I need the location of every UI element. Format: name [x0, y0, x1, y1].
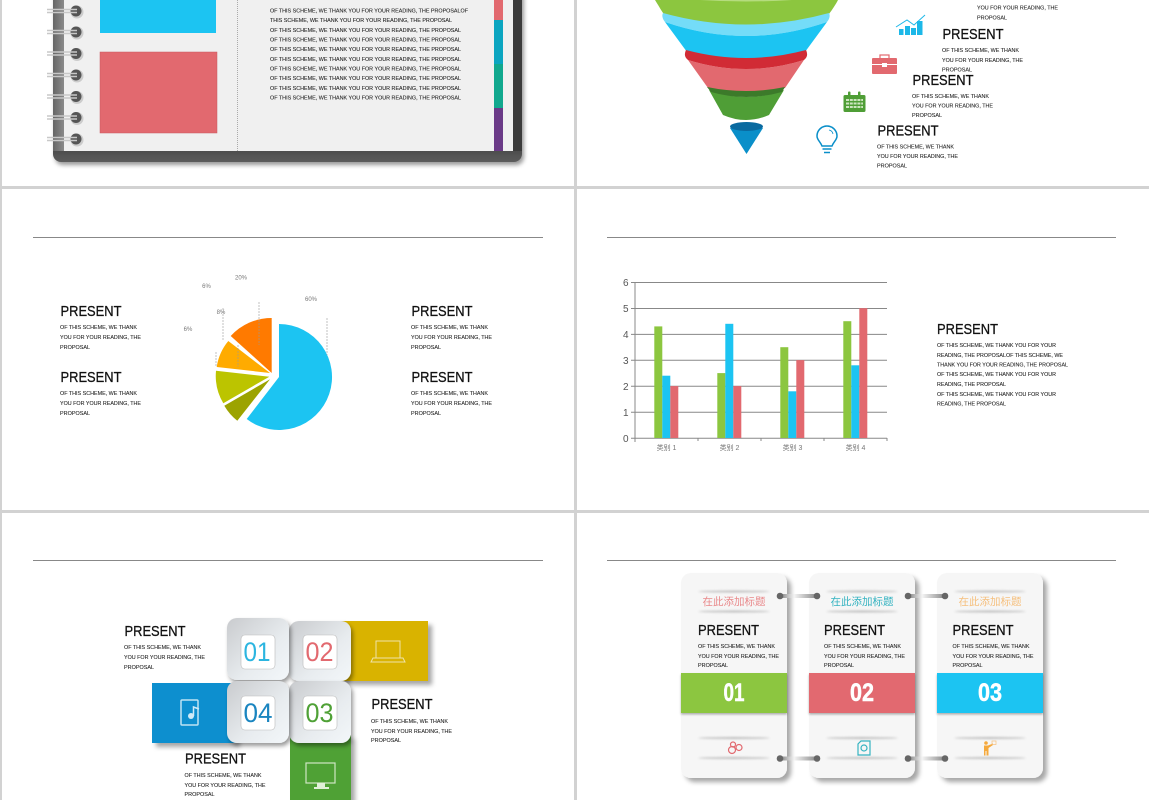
card 2: PROPOSAL [824, 663, 854, 669]
card 1: 在此添加标题 [702, 595, 766, 608]
bar chart: 2 [623, 382, 629, 393]
text: tile item 04: PRESENT [185, 750, 246, 768]
text: item calendar: YOU FOR YOUR READING, THE [877, 154, 958, 160]
text: bar chart description: READING, THE PROPOSAL [937, 402, 1006, 408]
text: pie right top: YOU FOR YOUR READING, THE [411, 335, 492, 341]
text: pie left top: PRESENT [60, 303, 122, 320]
card 3: OF THIS SCHEME, WE THANK [952, 644, 1030, 650]
bar chart: 6 [623, 278, 629, 289]
text: pie right top [411, 303, 492, 351]
tile 04 [227, 681, 289, 743]
text: pie right top: PRESENT [412, 303, 472, 320]
icon: calendar [844, 92, 866, 112]
pink image block [100, 52, 217, 133]
bar chart: 1 [623, 408, 629, 419]
text: tile item 04: YOU FOR YOUR READING, THE [184, 783, 266, 789]
card 1: PRESENT [698, 622, 759, 639]
text: tile item 01: PROPOSAL [124, 665, 154, 671]
bar chart: 类别 3 [783, 443, 803, 452]
gold block with laptop icon [340, 621, 428, 681]
panel: funnel slide [577, 0, 1149, 186]
card 3: 在此添加标题 [958, 595, 1022, 608]
card 1: YOU FOR YOUR READING, THE [698, 654, 779, 660]
tile 01 [227, 618, 289, 680]
text: top item: PROPOSAL [977, 16, 1007, 22]
pie chart: 6% [202, 284, 212, 290]
text: tile item 03: PROPOSAL [371, 738, 401, 744]
text: bar chart description: READING, THE PROPOSALOF THIS SCHEME, WE [937, 353, 1063, 359]
text: item chart: PRESENT [942, 26, 1004, 43]
panel: three cards slide [577, 513, 1149, 800]
card 3: PRESENT [952, 622, 1014, 639]
tile 04: 04 [244, 698, 272, 728]
text: pie left top [60, 303, 141, 351]
pie chart [184, 276, 332, 430]
text: bar chart description: READING, THE PROPOSAL [937, 382, 1006, 388]
icon: presenter [984, 741, 996, 756]
panel: numbered tiles slide [2, 513, 574, 800]
card 2: 02 [850, 679, 874, 707]
text: tile item 03: PRESENT [372, 696, 432, 713]
text: tile item 01: YOU FOR YOUR READING, THE [124, 655, 205, 661]
text: item briefcase: PROPOSAL [912, 113, 942, 119]
text: pie left top: PROPOSAL [60, 345, 90, 351]
bar chart: 4 [623, 330, 629, 341]
connector rings [777, 593, 948, 762]
bar chart [623, 278, 887, 452]
pie chart: 20% [235, 276, 248, 282]
text: pie left bottom [60, 369, 141, 417]
tile 03: 03 [306, 698, 334, 728]
text: item briefcase: YOU FOR YOUR READING, THE [912, 104, 993, 110]
text: tile item 03: OF THIS SCHEME, WE THANK [371, 719, 448, 725]
notebook text: THIS SCHEME, WE THANK YOU FOR YOUR READING, THE PROPOSAL [270, 18, 452, 24]
panel: pie chart slide [2, 189, 574, 510]
blue image block [100, 0, 216, 33]
tile 01: 01 [244, 637, 270, 667]
bar chart: 类别 2 [720, 443, 740, 452]
bar chart: 0 [623, 434, 629, 445]
text: pie right bottom: PRESENT [412, 369, 472, 386]
icon: rising chart [896, 15, 925, 35]
card 3: YOU FOR YOUR READING, THE [952, 654, 1034, 660]
icon: gears [728, 742, 742, 754]
card 2: YOU FOR YOUR READING, THE [824, 654, 905, 660]
text: item chart: OF THIS SCHEME, WE THANK [942, 48, 1019, 54]
tile 02 [289, 621, 351, 681]
page divider [236, 0, 238, 151]
text: item chart: YOU FOR YOUR READING, THE [942, 58, 1023, 64]
card 2: 在此添加标题 [830, 595, 894, 608]
notebook text: OF THIS SCHEME, WE THANK YOU FOR YOUR READING, THE PROPOSALOF [270, 8, 469, 14]
panel: bar chart slide [577, 189, 1149, 510]
text: item calendar: PRESENT [878, 122, 938, 140]
text: tile item 03 [371, 696, 452, 744]
pie chart: 8% [217, 310, 226, 316]
text: tile item 01: OF THIS SCHEME, WE THANK [124, 645, 201, 651]
icon: document chart [858, 741, 870, 755]
bar chart: 3 [623, 356, 629, 367]
text: pie right top: OF THIS SCHEME, WE THANK [411, 325, 488, 331]
text: pie left top: YOU FOR YOUR READING, THE [60, 335, 141, 341]
text: top item [977, 0, 1058, 22]
notebook text [270, 8, 469, 102]
notebook text: OF THIS SCHEME, WE THANK YOU FOR YOUR READING, THE PROPOSAL [270, 57, 461, 63]
text: tile item 04: OF THIS SCHEME, WE THANK [184, 773, 262, 779]
notebook text: OF THIS SCHEME, WE THANK YOU FOR YOUR READING, THE PROPOSAL [270, 28, 461, 34]
text: bar chart description: OF THIS SCHEME, WE THANK YOU FOR YOUR [937, 343, 1056, 349]
card 3: 03 [978, 679, 1002, 707]
text: item calendar: PROPOSAL [877, 164, 907, 170]
card 1 [681, 573, 787, 778]
icon: light bulb [817, 126, 837, 152]
card 1: 01 [724, 679, 745, 707]
text: pie right bottom: PROPOSAL [411, 411, 441, 417]
text: pie left bottom: YOU FOR YOUR READING, THE [60, 401, 141, 407]
text: tile item 01 [124, 623, 205, 671]
text: item briefcase [912, 72, 993, 119]
text: bar chart description: OF THIS SCHEME, WE THANK YOU FOR YOUR [937, 392, 1056, 398]
pie chart: 6% [184, 327, 193, 333]
blue block with music tablet icon [152, 683, 236, 743]
bar chart: 5 [623, 304, 629, 315]
text: pie right top: PROPOSAL [411, 345, 441, 351]
notebook text: OF THIS SCHEME, WE THANK YOU FOR YOUR READING, THE PROPOSAL [270, 86, 461, 92]
green block with monitor icon [290, 735, 351, 800]
text: bar chart description: PRESENT [937, 321, 998, 338]
text: bar chart description: THANK YOU FOR YOUR READING, THE PROPOSAL [937, 362, 1068, 368]
text: bar chart description: OF THIS SCHEME, WE THANK YOU FOR YOUR [937, 372, 1056, 378]
card 2: OF THIS SCHEME, WE THANK [824, 644, 901, 650]
text: tile item 01: PRESENT [124, 623, 186, 640]
notebook text: OF THIS SCHEME, WE THANK YOU FOR YOUR READING, THE PROPOSAL [270, 47, 461, 53]
notebook page [64, 0, 513, 151]
text: pie left bottom: PROPOSAL [60, 411, 90, 417]
text: pie right bottom: OF THIS SCHEME, WE THANK [411, 391, 488, 397]
text: item calendar: OF THIS SCHEME, WE THANK [877, 144, 954, 150]
text: bar chart description [937, 321, 1068, 408]
text: item briefcase: PRESENT [912, 72, 974, 89]
funnel chart [655, 0, 838, 154]
tile 03 [289, 681, 351, 743]
text: pie left bottom: OF THIS SCHEME, WE THANK [60, 391, 137, 397]
card 1: OF THIS SCHEME, WE THANK [698, 644, 775, 650]
notebook text: OF THIS SCHEME, WE THANK YOU FOR YOUR READING, THE PROPOSAL [270, 66, 461, 72]
text: pie right bottom: YOU FOR YOUR READING, THE [411, 401, 492, 407]
text: pie right bottom [411, 369, 492, 417]
tile 02: 02 [306, 637, 334, 667]
notebook text: OF THIS SCHEME, WE THANK YOU FOR YOUR READING, THE PROPOSAL [270, 96, 461, 102]
index tabs [494, 0, 503, 151]
text: item chart: PROPOSAL [942, 68, 972, 74]
pie chart: 60% [305, 297, 318, 303]
card 2: PRESENT [824, 622, 885, 639]
text: item briefcase: OF THIS SCHEME, WE THANK [912, 94, 989, 100]
icon: briefcase [872, 55, 897, 74]
panel: notebook slide [2, 0, 574, 186]
text: pie left top: OF THIS SCHEME, WE THANK [60, 325, 137, 331]
text: tile item 03: YOU FOR YOUR READING, THE [371, 729, 452, 735]
spiral binding [47, 6, 84, 146]
text: tile item 04: PROPOSAL [184, 792, 214, 798]
text: item chart [942, 26, 1023, 74]
card 1: PROPOSAL [698, 663, 728, 669]
notebook text: OF THIS SCHEME, WE THANK YOU FOR YOUR READING, THE PROPOSAL [270, 76, 461, 82]
text: tile item 04 [184, 750, 266, 798]
text: item calendar [877, 122, 958, 170]
bar chart: 类别 4 [846, 443, 866, 452]
notebook text: OF THIS SCHEME, WE THANK YOU FOR YOUR READING, THE PROPOSAL [270, 38, 461, 44]
text: top item: YOU FOR YOUR READING, THE [977, 6, 1058, 12]
text: pie left bottom: PRESENT [60, 369, 122, 386]
card 2 [809, 573, 915, 778]
card 3: PROPOSAL [952, 663, 982, 669]
notebook cover [53, 0, 522, 162]
card 3 [937, 573, 1043, 778]
bar chart: 类别 1 [657, 443, 677, 452]
